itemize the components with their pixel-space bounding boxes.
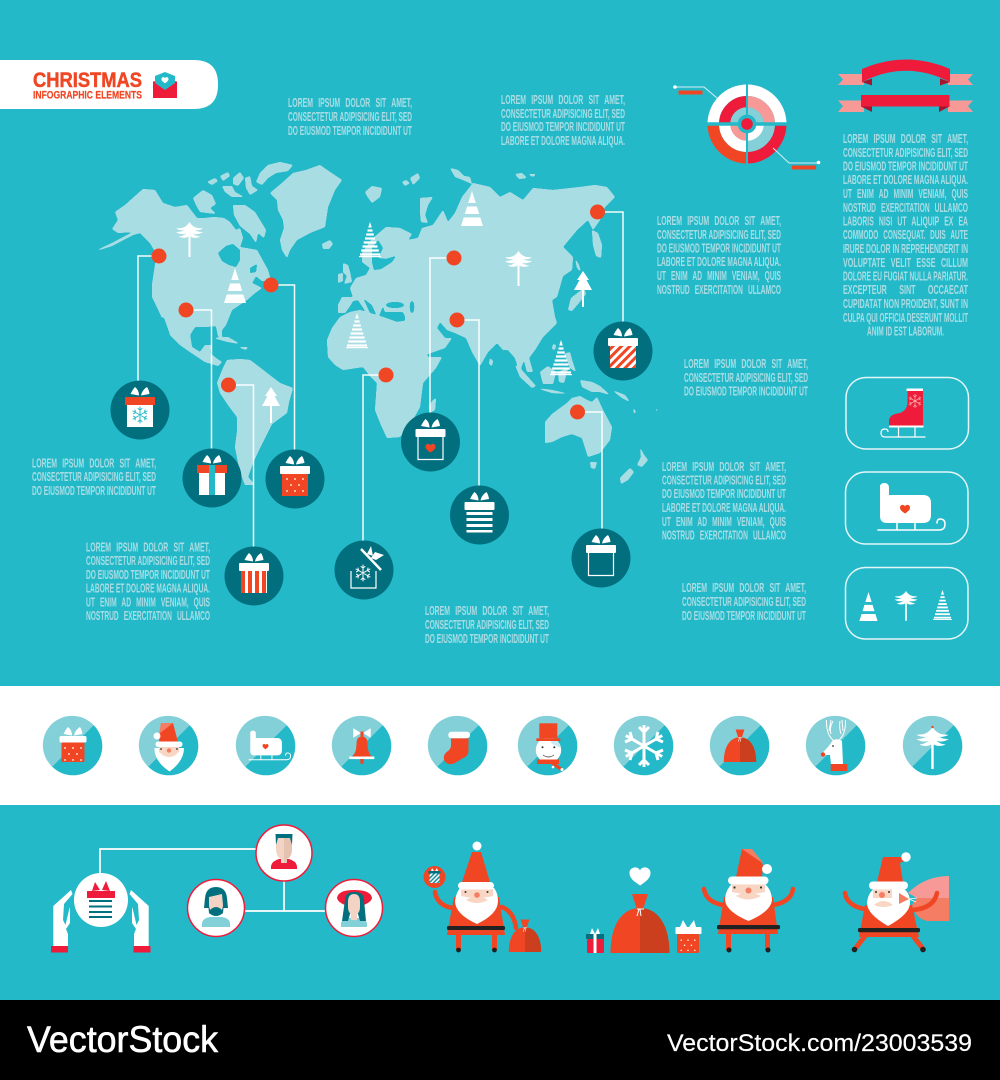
- icon: reindeer: [806, 716, 865, 775]
- text block: LOREM IPSUM DOLOR SIT AMET,: [288, 96, 412, 110]
- text block: [657, 214, 781, 297]
- text block: NOSTRUD EXERCITATION ULLAMCO: [662, 528, 786, 542]
- ribbon: straight: [838, 95, 973, 112]
- icon: snowman: [518, 716, 577, 775]
- text block: LOREM IPSUM DOLOR SIT AMET,: [501, 93, 625, 107]
- text block: CONSECTETUR ADIPISICING ELIT, SED: [425, 618, 549, 632]
- text block: DO EIUSMOD TEMPOR INCIDIDUNT UT: [682, 609, 806, 623]
- icon: heart: [630, 867, 650, 885]
- map: islands: [193, 162, 659, 484]
- panel: sled: [846, 472, 968, 544]
- network lines: [100, 849, 325, 911]
- panel: gift network: [51, 825, 382, 952]
- gift marker: vertical stripes: [224, 546, 284, 606]
- gift marker: open box: [334, 540, 394, 600]
- santa running with sack: [845, 852, 949, 952]
- icon: gift circle: [74, 873, 128, 927]
- icon: envelope: [153, 72, 177, 98]
- map: africa: [327, 310, 442, 438]
- footer url: VectorStock.com/23003539: [667, 1030, 972, 1057]
- text block: DO EIUSMOD TEMPOR INCIDIDUNT UT: [684, 384, 808, 398]
- icon: sack: [710, 716, 769, 775]
- tree: [461, 191, 483, 226]
- text block: NOSTRUD EXERCITATION ULLAMCO: [86, 609, 210, 623]
- tree: [176, 222, 203, 257]
- text block: NOSTRUD EXERCITATION ULLAMCO: [657, 283, 781, 297]
- map: greenland: [270, 165, 342, 258]
- santa arms: [435, 892, 516, 928]
- tree: [224, 268, 246, 303]
- world map: [93, 162, 659, 485]
- icon: tree: [859, 592, 878, 621]
- text block: [288, 96, 412, 138]
- sack on back: [908, 876, 949, 898]
- icon: tree: [933, 590, 952, 620]
- big gift: [676, 920, 702, 953]
- small gift: [586, 928, 604, 953]
- text block: UT ENIM AD MINIM VENIAM, QUIS: [657, 269, 781, 283]
- gift marker: ribbon: [182, 448, 242, 508]
- target chart: [673, 84, 820, 170]
- gift marker: dotted: [266, 450, 324, 508]
- text block: [662, 460, 786, 542]
- santa body: [447, 897, 505, 935]
- panel: ice skate: [846, 378, 968, 449]
- text block: DO EIUSMOD TEMPOR INCIDIDUNT UT: [288, 124, 412, 138]
- text block: CONSECTETUR ADIPISICING ELIT, SED: [662, 474, 786, 488]
- title: CHRISTMAS: [33, 68, 142, 92]
- icon: bell: [332, 716, 391, 775]
- text block: [86, 540, 210, 623]
- icon: woman: [326, 880, 382, 936]
- santa arms up: [704, 849, 793, 952]
- gift marker: horizontal stripes: [450, 486, 509, 544]
- text block: [682, 581, 806, 623]
- icon: fir tree: [903, 716, 962, 775]
- text block: UT ENIM AD MINIM VENIAM, QUIS: [86, 596, 210, 610]
- text block: UT ENIM AD MINIM VENIAM, QUIS: [662, 515, 786, 529]
- title pill: [0, 60, 218, 109]
- text block: DO EIUSMOD TEMPOR INCIDIDUNT UT: [657, 242, 781, 256]
- tree: [574, 271, 592, 307]
- badge gift: [424, 866, 446, 888]
- ribbon: curved: [838, 60, 973, 86]
- text block: LABORE ET DOLORE MAGNA ALIQUA.: [662, 501, 786, 515]
- text block: LOREM IPSUM DOLOR SIT AMET,: [684, 357, 808, 371]
- icon: santa head: [139, 716, 198, 775]
- text block: DO EIUSMOD TEMPOR INCIDIDUNT UT: [501, 120, 625, 134]
- map: south america: [217, 359, 293, 485]
- text blocks: [32, 93, 968, 646]
- legs: [855, 936, 923, 949]
- chart leader: [675, 87, 818, 163]
- icon: sled: [878, 483, 945, 530]
- map: eurasia: [338, 183, 615, 382]
- text block: [32, 456, 156, 498]
- text block: CONSECTETUR ADIPISICING ELIT, SED: [684, 371, 808, 385]
- icon: man: [256, 825, 312, 881]
- arms: [704, 889, 793, 905]
- gift marker: snowflake: [110, 380, 170, 440]
- footer: [0, 1000, 1000, 1080]
- text block: LABORE ET DOLORE MAGNA ALIQUA.: [657, 255, 781, 269]
- icon: skate: [881, 388, 926, 437]
- gift marker: diagonal stripes: [594, 322, 652, 380]
- gifts and sack: [586, 867, 702, 953]
- subtitle: INFOGRAPHIC ELEMENTS: [33, 90, 142, 102]
- text block: CONSECTETUR ADIPISICING ELIT, SED: [682, 595, 806, 609]
- trees on map: [176, 191, 592, 423]
- text block: CONSECTETUR ADIPISICING ELIT, SED: [288, 110, 412, 124]
- text block: LOREM IPSUM DOLOR SIT AMET,: [682, 581, 806, 595]
- connector lines: [138, 212, 623, 548]
- text block: LABORE ET DOLORE MAGNA ALIQUA.: [501, 134, 625, 148]
- text block: DO EIUSMOD TEMPOR INCIDIDUNT UT: [662, 487, 786, 501]
- text block: [425, 604, 549, 646]
- icon: hands: [51, 890, 150, 952]
- arms: [845, 893, 937, 910]
- icon: tree: [895, 591, 917, 621]
- santa with badge and sack: [424, 842, 541, 952]
- icon: bearded man: [188, 880, 244, 936]
- text block: DO EIUSMOD TEMPOR INCIDIDUNT UT: [425, 632, 549, 646]
- tree: [505, 251, 532, 286]
- sack: [610, 894, 670, 953]
- small sack: [509, 920, 541, 952]
- body: [859, 905, 919, 937]
- icon: gift: [43, 716, 102, 775]
- tree: [346, 313, 368, 348]
- chart rings: [713, 90, 781, 158]
- text block: [684, 357, 808, 398]
- location markers: [152, 204, 605, 420]
- text block: LOREM IPSUM DOLOR SIT AMET,: [662, 460, 786, 474]
- footer logo: VectorStock: [27, 1019, 218, 1060]
- text block: LOREM IPSUM DOLOR SIT AMET,: [425, 604, 549, 618]
- text block: DO EIUSMOD TEMPOR INCIDIDUNT UT: [32, 484, 156, 498]
- tree: [262, 387, 280, 423]
- icon strip: [0, 686, 1000, 805]
- text block: LOREM IPSUM DOLOR SIT AMET,: [32, 456, 156, 470]
- icon: snowflake: [614, 716, 673, 775]
- text block: LOREM IPSUM DOLOR SIT AMET,: [86, 540, 210, 554]
- gift marker: heart: [401, 412, 460, 472]
- text block: DO EIUSMOD TEMPOR INCIDIDUNT UT: [86, 568, 210, 582]
- panel: trees: [846, 568, 968, 639]
- gift marker: outline box: [572, 528, 630, 588]
- text block: LOREM IPSUM DOLOR SIT AMET,: [657, 214, 781, 228]
- text block: LABORE ET DOLORE MAGNA ALIQUA.: [86, 582, 210, 596]
- map: north america: [93, 189, 271, 366]
- text block: CONSECTETUR ADIPISICING ELIT, SED: [86, 554, 210, 568]
- text block: CONSECTETUR ADIPISICING ELIT, SED: [657, 228, 781, 242]
- icon: stocking: [428, 716, 487, 775]
- text block: CONSECTETUR ADIPISICING ELIT, SED: [32, 470, 156, 484]
- map: australia: [545, 396, 612, 457]
- map: inland seas: [160, 240, 574, 335]
- tree: [359, 222, 381, 257]
- text block: CONSECTETUR ADIPISICING ELIT, SED: [501, 107, 625, 121]
- body: [718, 897, 778, 934]
- tree: [550, 340, 572, 375]
- icon: sled small: [236, 716, 295, 775]
- text block: [843, 132, 968, 338]
- text block: [501, 93, 625, 148]
